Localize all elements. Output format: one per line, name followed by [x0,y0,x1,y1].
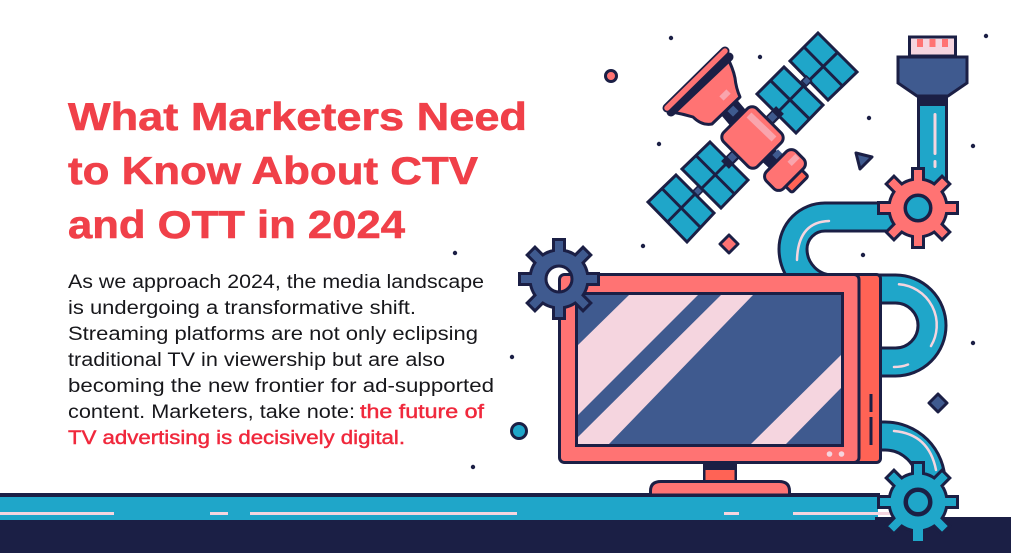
dish [667,51,740,124]
ring: teal [512,424,526,438]
intro paragraph: content. Marketers, take note: [68,401,355,423]
gear: navy on tv [520,240,598,318]
title: to Know About CTV [68,150,478,193]
satellite module [762,147,808,193]
intro paragraph: is undergoing a transformative shift. [68,297,416,319]
panel connectors [693,76,811,196]
teal gear bottom tooth [913,526,923,541]
vertical pipe [917,104,948,186]
tv frame [560,274,859,462]
satellite [648,33,857,242]
intro paragraph: the future of [360,401,485,423]
title: and OTT in 2024 [68,204,405,247]
tv indicator lights [827,451,844,457]
module neck [765,149,784,168]
cable connector plug [898,37,967,107]
intro paragraph: becoming the new frontier for ad-supported [68,375,494,397]
title [68,96,527,247]
gear: teal [878,462,958,542]
scattered dots [453,34,988,469]
ring: coral [606,70,616,82]
decorative shapes [512,70,947,438]
satellite body [719,104,786,171]
intro paragraph: As we approach 2024, the media landscape [68,271,484,293]
diamond: blue [929,394,947,412]
intro paragraph: TV advertising is decisively digital. [68,427,405,449]
tv screen [576,294,842,446]
tv stand [650,462,790,495]
intro paragraph: Streaming platforms are not only eclipsing [68,323,478,345]
tv side panel [850,274,880,462]
television [560,274,880,495]
solar panels [648,33,857,242]
lower pipe [870,431,936,482]
upper winding pipe [793,217,937,367]
dish neck [722,99,744,125]
diamond: coral [720,235,738,253]
intro paragraph: traditional TV in viewership but are also [68,349,445,371]
title: What Marketers Need [68,96,527,139]
gear: coral [878,168,958,248]
intro paragraph [68,271,494,449]
ground band [0,493,1011,553]
triangle [856,153,872,169]
